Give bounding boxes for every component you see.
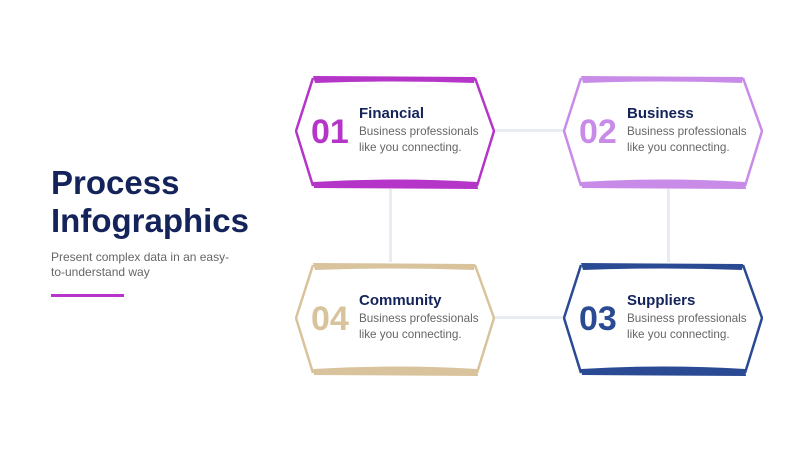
panel: 03 Suppliers [563, 263, 763, 376]
panel: 02 Business: Business [627, 105, 694, 122]
panel: 03 Suppliers: Business professionals [627, 312, 747, 325]
panel: 04 Community: Community [359, 292, 442, 309]
title [51, 164, 249, 239]
subtitle: Present complex data in an easy- [51, 250, 229, 264]
panel: 03 Suppliers: 03 [579, 300, 617, 338]
panel: 04 Community [295, 263, 495, 376]
title: Process [51, 164, 179, 201]
subtitle: to-understand way [51, 265, 150, 279]
panel: 01 Financial: Financial [359, 105, 424, 122]
panel: 01 Financial: like you connecting. [359, 140, 462, 154]
panel: 02 Business [563, 76, 763, 189]
panel: 01 Financial [295, 76, 495, 189]
panel: 04 Community: like you connecting. [359, 328, 462, 340]
title: Infographics [51, 202, 249, 239]
subtitle [51, 250, 229, 279]
panel: 04 Community: 04 [311, 300, 349, 338]
panel: 01 Financial: Business professionals [359, 125, 479, 138]
accent line [51, 294, 124, 297]
panel: 01 Financial: 01 [311, 113, 349, 151]
panel: 03 Suppliers: Suppliers [627, 292, 695, 309]
panel: 02 Business: like you connecting. [627, 140, 730, 154]
panel: 03 Suppliers: like you connecting. [627, 328, 730, 340]
panel: 02 Business: Business professionals [627, 125, 747, 138]
panel: 02 Business: 02 [579, 113, 617, 151]
panel: 04 Community: Business professionals [359, 312, 479, 325]
